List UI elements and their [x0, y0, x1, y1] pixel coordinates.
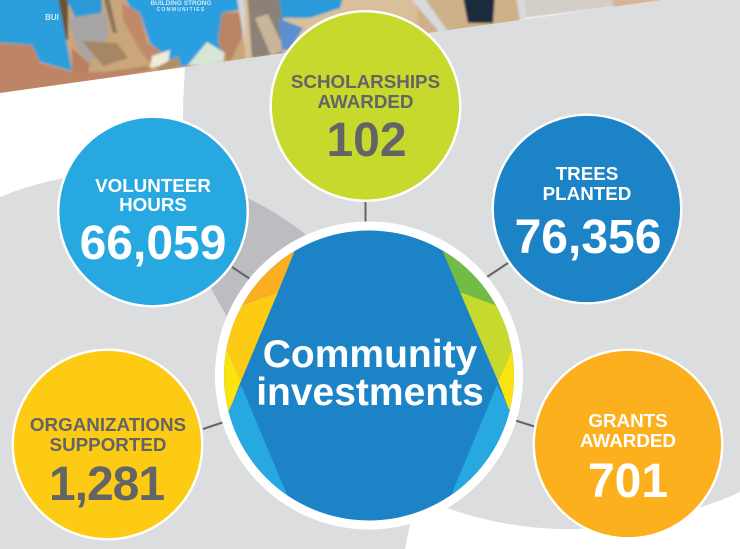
- number: 701: 701: [588, 455, 668, 508]
- label: organizations: ORGANIZATIONS: [30, 414, 186, 435]
- title: investments: investments: [256, 371, 484, 414]
- label: grants: GRANTS: [588, 410, 668, 431]
- label: awarded: AWARDED: [580, 430, 676, 451]
- number: 102: 102: [326, 114, 407, 167]
- circle: volunteer hours: [58, 117, 248, 306]
- title: community: Community: [263, 333, 478, 376]
- label: supported: SUPPORTED: [50, 434, 166, 455]
- circle: grants awarded: [534, 350, 722, 538]
- hexagon colour wedges: [215, 225, 525, 525]
- central circle: community investments: [215, 222, 525, 530]
- label: trees: TREES: [556, 163, 618, 184]
- label: volunteer: VOLUNTEER: [95, 175, 211, 196]
- label: awarded: AWARDED: [318, 91, 414, 112]
- shirt print text: BUILDING STRONG: [150, 0, 212, 7]
- shirt print text line two: COMMUNITIES: [157, 7, 205, 13]
- left shirt print text: BUI: [45, 13, 59, 22]
- label: scholarships: SCHOLARSHIPS: [291, 71, 440, 92]
- circle: scholarships awarded: [271, 11, 460, 201]
- number: 76,356: 76,356: [515, 211, 661, 264]
- photo strip: volunteers: [0, 0, 670, 102]
- number: 1,281: 1,281: [49, 458, 164, 511]
- label: hours: HOURS: [119, 194, 187, 215]
- circle: trees planted: [493, 115, 681, 303]
- connector lines: [203, 200, 536, 429]
- number: 66,059: 66,059: [80, 217, 226, 270]
- circle: organizations supported: [13, 350, 202, 539]
- label: planted: PLANTED: [543, 183, 631, 204]
